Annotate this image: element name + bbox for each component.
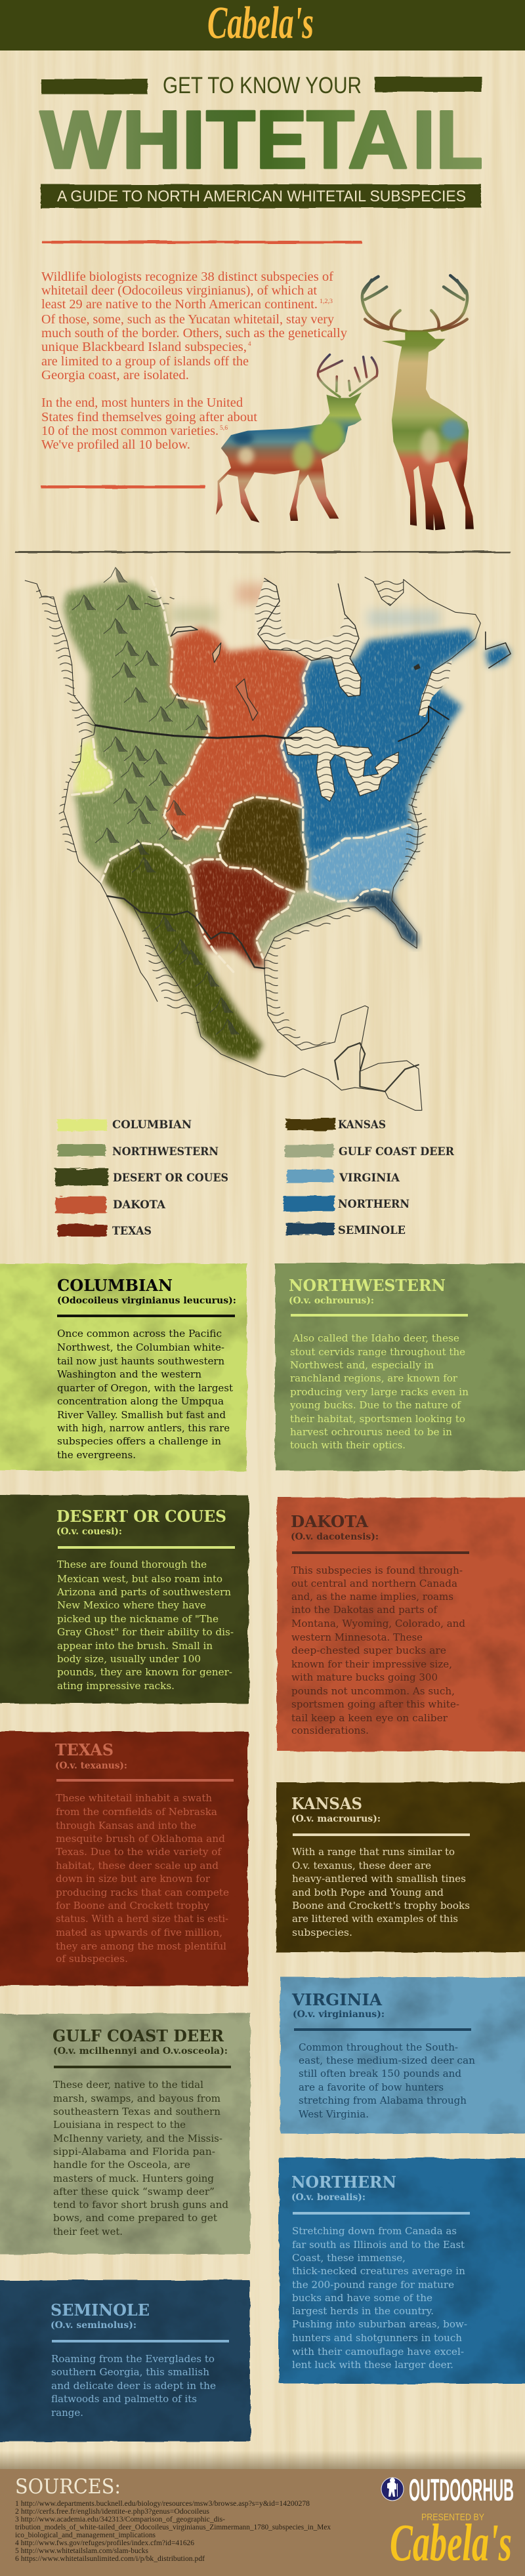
body text: for Boone and Crockett trophy bbox=[56, 1901, 210, 1912]
intro text: whitetail deer (Odocoileus virginianus), of which at bbox=[41, 284, 318, 298]
sources list: 3 http://www.academia.edu/342313/Comparison_of_geographic_dis- bbox=[15, 2514, 225, 2524]
body text: concentration along the Umpqua bbox=[57, 1397, 224, 1407]
heading: virginia: VIRGINIA bbox=[291, 1990, 383, 2009]
intro text: 1,2,3 bbox=[320, 298, 333, 304]
body text: sippi-Alabama and Florida pan- bbox=[53, 2147, 215, 2157]
intro rule bottom bbox=[41, 485, 205, 488]
body text: subspecies offers a challenge in bbox=[57, 1437, 221, 1447]
body text bbox=[56, 1793, 229, 1965]
body text: picked up the nickname of "The bbox=[57, 1614, 219, 1625]
panel: virginia bbox=[280, 1977, 525, 2133]
body text: the evergreens. bbox=[57, 1450, 136, 1461]
body text bbox=[289, 1334, 469, 1451]
body text bbox=[53, 2080, 228, 2238]
title bar right bbox=[375, 77, 482, 92]
body text: still often break 150 pounds and bbox=[299, 2069, 461, 2079]
body text: southern Georgia, this smallish bbox=[51, 2367, 209, 2378]
body text: they are among the most plentiful bbox=[56, 1942, 226, 1952]
body text: ranchland regions, are known for bbox=[290, 1374, 457, 1384]
legend item: dakota: DAKOTA bbox=[113, 1198, 166, 1212]
intro text: Of those, some, such as the Yucatan whitetail, stay very bbox=[41, 313, 334, 327]
body text: largest herds in the country. bbox=[292, 2306, 434, 2317]
heading: desert or coues: DESERT OR COUES bbox=[56, 1507, 226, 1526]
mountains bbox=[72, 567, 240, 1034]
body text: Stretching down from Canada as bbox=[292, 2226, 457, 2237]
subheading: (O.v. seminolus): bbox=[51, 2320, 136, 2331]
sources list bbox=[15, 2499, 331, 2563]
body text: Arizona and parts of southwestern bbox=[56, 1587, 231, 1598]
body text: touch with their optics. bbox=[290, 1441, 406, 1451]
body text: hunters and shotgunners in touch bbox=[292, 2333, 462, 2344]
body text: flatwoods and palmetto of its bbox=[51, 2394, 197, 2405]
range: northwestern bbox=[64, 582, 224, 870]
panel: northern bbox=[279, 2158, 525, 2384]
range boundaries: dashed bbox=[72, 577, 412, 973]
range: seminole bbox=[352, 892, 419, 949]
body text: Northwest and, especially in bbox=[290, 1360, 434, 1371]
body text: known for their impressive size, bbox=[291, 1660, 452, 1670]
body text: the 200-pound range for mature bbox=[292, 2280, 454, 2291]
body text: far south as Illinois and to the East bbox=[292, 2240, 465, 2251]
body text: and delicate deer is adept in the bbox=[51, 2381, 216, 2392]
body text: status. With a herd size that is esti- bbox=[56, 1914, 228, 1925]
legend item: northwestern bbox=[58, 1145, 219, 1158]
legend item: columbian: COLUMBIAN bbox=[112, 1118, 192, 1132]
body text: River Valley. Smallish but fast and bbox=[57, 1410, 226, 1421]
heading: kansas: KANSAS bbox=[291, 1794, 362, 1813]
body text: Once common across the Pacific bbox=[57, 1329, 222, 1339]
intro text: 10 of the most common varieties. bbox=[41, 424, 219, 438]
sources list: 5 http://www.whitetailslam.com/slam-bucks bbox=[15, 2546, 148, 2555]
legend item: kansas bbox=[286, 1118, 386, 1132]
subheading: (O.v. macrourus): bbox=[291, 1814, 381, 1824]
body text: handle for the Osceola, are bbox=[53, 2160, 190, 2171]
body text: quarter of Oregon, with the largest bbox=[57, 1383, 233, 1394]
body text: their habitat, sportsmen looking to bbox=[290, 1414, 465, 1425]
body text: stout cervids range throughout the bbox=[290, 1347, 465, 1358]
legend item: northern bbox=[284, 1196, 410, 1211]
body text: Roaming from the Everglades to bbox=[51, 2354, 215, 2365]
body text: thick-necked creatures average in bbox=[292, 2266, 465, 2277]
water: hudson bay and arctic hatching bbox=[33, 577, 452, 1050]
subtitle band: A GUIDE TO NORTH AMERICAN WHITETAIL SUBSPECIES bbox=[57, 188, 466, 205]
divider shadow line bbox=[14, 551, 511, 553]
body text: Common throughout the South- bbox=[299, 2043, 458, 2053]
body text: heavy-antlered with smallish tines bbox=[292, 1874, 466, 1885]
body text: ating impressive racks. bbox=[57, 1681, 175, 1692]
body text: producing racks that can compete bbox=[56, 1888, 229, 1898]
range: desert or coues bbox=[104, 843, 263, 1061]
intro text: 5,6 bbox=[220, 424, 228, 431]
body text: Montana, Wyoming, Colorado, and bbox=[291, 1619, 465, 1629]
body text: New Mexico where they have bbox=[57, 1601, 206, 1611]
range: columbian bbox=[75, 739, 112, 794]
legend item: seminole bbox=[286, 1223, 406, 1237]
body text: and both Pope and Young and bbox=[292, 1888, 444, 1898]
legend item: gulf coast deer bbox=[285, 1145, 455, 1158]
body text: are a favorite of bow hunters bbox=[299, 2083, 444, 2093]
sources list: 2 http://cerfs.free.fr/english/identite-e.php3?genus=Odocoileus bbox=[15, 2506, 209, 2516]
title: whitetail: A bbox=[348, 94, 408, 186]
body text: Pushing into suburban areas, bow- bbox=[292, 2320, 467, 2330]
intro rule top bbox=[42, 241, 362, 244]
body text: are littered with examples of this bbox=[292, 1914, 458, 1925]
heading: gulf coast deer: GULF COAST DEER bbox=[52, 2026, 224, 2045]
body text: Coast, these immense, bbox=[292, 2253, 406, 2264]
heading: dakota: DAKOTA bbox=[291, 1512, 369, 1531]
panel: kansas bbox=[276, 1782, 525, 1952]
title line: get to know your: GET TO KNOW YOUR bbox=[163, 73, 362, 98]
body text: harvest ochrourus need to be in bbox=[290, 1427, 452, 1438]
body text: Boone and Crockett's trophy books bbox=[292, 1901, 470, 1912]
body text: stretching from Alabama through bbox=[299, 2096, 467, 2106]
presented by: PRESENTED BY bbox=[421, 2512, 484, 2523]
legend bbox=[55, 1118, 455, 1238]
map: whitetail ranges of North America bbox=[25, 567, 511, 1111]
header band bbox=[0, 0, 525, 51]
title block bbox=[40, 73, 483, 208]
intro text: are limited to a group of islands off the bbox=[41, 355, 249, 369]
body text: sportsmen going after this white- bbox=[291, 1700, 459, 1710]
body text: east, these medium-sized deer can bbox=[299, 2056, 475, 2066]
body text: and, as the name implies, roams bbox=[291, 1592, 453, 1603]
intro text bbox=[41, 270, 347, 452]
body text: from the cornfields of Nebraska bbox=[56, 1807, 217, 1818]
legend item: gulf coast deer: GULF COAST DEER bbox=[339, 1145, 455, 1158]
body text: O.v. texanus, these deer are bbox=[292, 1861, 431, 1871]
subheading: (O.v. mcilhennyi and O.v.osceola): bbox=[53, 2046, 228, 2056]
body text: tend to favor short brush guns and bbox=[53, 2200, 228, 2211]
title: whitetail bbox=[40, 94, 483, 186]
body text: into the Dakotas and parts of bbox=[291, 1605, 438, 1616]
heading: texas: TEXAS bbox=[55, 1740, 114, 1759]
body text: after these quick “swamp deer” bbox=[53, 2187, 215, 2198]
legend item: columbian bbox=[58, 1118, 192, 1132]
body text: Gray Ghost" for their ability to dis- bbox=[57, 1627, 234, 1638]
intro text: States find themselves going after about bbox=[41, 411, 258, 424]
legend item: texas: TEXAS bbox=[112, 1225, 152, 1238]
body text: These whitetail inhabit a swath bbox=[56, 1793, 212, 1804]
range: virginia bbox=[310, 825, 419, 901]
body text: These deer, native to the tidal bbox=[53, 2080, 203, 2091]
body text: with their camouflage have excel- bbox=[292, 2347, 464, 2358]
legend item: seminole: SEMINOLE bbox=[338, 1224, 406, 1237]
title: whitetail: I bbox=[182, 94, 205, 186]
panel: columbian bbox=[0, 1263, 247, 1471]
range: kansas bbox=[218, 797, 308, 891]
body text: Mexican west, but also roam into bbox=[57, 1574, 222, 1585]
subheading: (Odocoileus virginianus leucurus): bbox=[57, 1296, 236, 1306]
range: dakota bbox=[164, 628, 310, 840]
legend item: desert or coues bbox=[55, 1169, 228, 1185]
body text: pounds not uncommon. As such, bbox=[291, 1687, 455, 1697]
panel: texas bbox=[0, 1732, 248, 1986]
body text bbox=[51, 2354, 216, 2419]
intro text: unique Blackbeard Island subspecies, bbox=[41, 340, 247, 354]
subheading: (O.v. borealis): bbox=[291, 2192, 366, 2203]
body text: out central and northern Canada bbox=[291, 1579, 457, 1589]
body text: pounds, they are known for gener- bbox=[57, 1667, 232, 1678]
sources list: 4 http://www.fws.gov/refuges/profiles/index.cfm?id=41626 bbox=[15, 2538, 194, 2547]
legend item: virginia bbox=[287, 1170, 400, 1185]
subheading: (O.v. ochrourus): bbox=[289, 1296, 374, 1306]
panel: gulf coast deer bbox=[0, 2014, 250, 2254]
faint color washes bbox=[171, 584, 440, 626]
body text: mated as upwards of five million, bbox=[56, 1928, 222, 1938]
body text: producing very large racks even in bbox=[290, 1387, 469, 1398]
body text: considerations. bbox=[291, 1726, 369, 1736]
body text: down in size but are known for bbox=[56, 1874, 210, 1885]
body text: Northwest, the Columbian white- bbox=[57, 1343, 224, 1353]
body text bbox=[291, 1566, 465, 1736]
heading: northwestern: NORTHWESTERN bbox=[289, 1276, 446, 1295]
body text: range. bbox=[51, 2408, 83, 2419]
heading: northern: NORTHERN bbox=[291, 2173, 396, 2192]
title: whitetail: I bbox=[412, 94, 436, 186]
range: gulf coast bbox=[256, 892, 352, 956]
intro text: much south of the border. Others, such as the genetically bbox=[41, 327, 347, 340]
intro text: Georgia coast, are isolated. bbox=[41, 369, 189, 382]
body text: bucks and have some of the bbox=[292, 2293, 432, 2304]
body text: western Minnesota. These bbox=[291, 1633, 423, 1643]
body text: of subspecies. bbox=[56, 1954, 128, 1965]
subheading: (O.v. virginianus): bbox=[293, 2009, 385, 2020]
range: northern bbox=[282, 630, 511, 859]
body text: Texas. Due to the wide variety of bbox=[56, 1847, 222, 1858]
legend item: dakota bbox=[56, 1196, 166, 1214]
panel: northwestern bbox=[275, 1263, 525, 1471]
body text: Louisiana in respect to the bbox=[53, 2120, 186, 2131]
body text: deep-chested super bucks are bbox=[291, 1646, 446, 1656]
body text: masters of muck. Hunters going bbox=[53, 2174, 214, 2184]
title: whitetail: L bbox=[436, 94, 483, 186]
heading: seminole: SEMINOLE bbox=[51, 2300, 150, 2320]
sources list: tribution_models_of_white-tailed_deer_Odocoileus_virginianus_Zimmermann_1780_subspecies_in_Mex bbox=[15, 2522, 331, 2531]
body text bbox=[299, 2043, 475, 2120]
legend item: northwestern: NORTHWESTERN bbox=[112, 1145, 219, 1158]
legend item: kansas: KANSAS bbox=[338, 1118, 386, 1132]
body text: These are found thorough the bbox=[57, 1560, 207, 1570]
heading: sources: SOURCES: bbox=[15, 2475, 121, 2499]
icon: large deer silhouette bbox=[362, 276, 476, 530]
body text: marsh, swamps, and bayous from bbox=[53, 2094, 220, 2104]
body text: their feet wet. bbox=[53, 2227, 123, 2238]
body text: tail keep a keen eye on caliber bbox=[291, 1713, 448, 1724]
body text: habitat, these deer scale up and bbox=[56, 1861, 219, 1871]
body text: mesquite brush of Oklahoma and bbox=[56, 1834, 225, 1845]
sources list: 6 https://www.whitetailsunlimited.com/i/p/bk_distribution.pdf bbox=[15, 2554, 205, 2563]
body text bbox=[292, 2226, 467, 2371]
panel: dakota bbox=[277, 1498, 525, 1751]
panel: seminole bbox=[0, 2280, 250, 2442]
body text: This subspecies is found through- bbox=[291, 1566, 463, 1576]
panel: desert or coues bbox=[0, 1495, 249, 1704]
body text: bows, and come prepared to get bbox=[53, 2213, 217, 2224]
legend item: northern: NORTHERN bbox=[338, 1198, 410, 1211]
coastlines and borders bbox=[25, 577, 511, 1111]
range: texas bbox=[191, 859, 295, 967]
title: whitetail: W bbox=[40, 94, 121, 186]
footer bbox=[0, 2469, 525, 2576]
legend item: texas bbox=[58, 1225, 152, 1238]
body text bbox=[56, 1560, 234, 1692]
body text: Also called the Idaho deer, these bbox=[292, 1334, 459, 1344]
body text: young bucks. Due to the nature of bbox=[289, 1400, 462, 1411]
sources list: ico_biological_and_management_implications bbox=[15, 2530, 156, 2539]
body text: subspecies. bbox=[292, 1928, 352, 1938]
title: whitetail: E bbox=[256, 94, 307, 186]
body text: McIhenny variety, and the Missis- bbox=[53, 2134, 222, 2144]
intro text: In the end, most hunters in the United bbox=[41, 396, 243, 410]
intro text: 4 bbox=[248, 340, 251, 347]
body text: southeastern Texas and southern bbox=[53, 2107, 220, 2117]
body text: Washington and the western bbox=[57, 1370, 201, 1380]
body text: appear into the brush. Small in bbox=[57, 1641, 213, 1652]
body text: with high, narrow antlers, this rare bbox=[57, 1423, 230, 1434]
body text: West Virginia. bbox=[299, 2110, 369, 2120]
body text bbox=[57, 1329, 233, 1461]
legend item: virginia: VIRGINIA bbox=[339, 1172, 400, 1185]
title: whitetail: T bbox=[306, 94, 354, 186]
title: whitetail: H bbox=[122, 94, 181, 186]
subheading: (O.v. dacotensis): bbox=[291, 1532, 379, 1542]
intro text: least 29 are native to the North American continent. bbox=[41, 298, 318, 312]
intro text: Wildlife biologists recognize 38 distinct subspecies of bbox=[41, 270, 334, 284]
heading: columbian: COLUMBIAN bbox=[57, 1276, 173, 1295]
sources list: 1 http://www.departments.bucknell.edu/biology/resources/msw3/browse.asp?s=y&id=14200278 bbox=[15, 2499, 310, 2508]
body text: With a range that runs similar to bbox=[292, 1847, 455, 1858]
title: whitetail: T bbox=[206, 94, 255, 186]
icon: small deer silhouette bbox=[216, 355, 377, 523]
body text: through Kansas and into the bbox=[56, 1821, 196, 1831]
title bar left bbox=[41, 79, 148, 94]
legend item: desert or coues: DESERT OR COUES bbox=[113, 1172, 228, 1185]
subheading: (O.v. texanus): bbox=[55, 1761, 127, 1771]
subheading: (O.v. couesi): bbox=[56, 1526, 122, 1537]
body text: lent luck with these larger deer. bbox=[292, 2360, 453, 2371]
intro text: We've profiled all 10 below. bbox=[41, 438, 190, 452]
body text: with mature bucks going 300 bbox=[291, 1673, 438, 1683]
icon: hiker badge bbox=[381, 2478, 404, 2501]
body text bbox=[292, 1847, 470, 1938]
body text: body size, usually under 100 bbox=[57, 1654, 201, 1665]
body text: tail now just haunts southwestern bbox=[57, 1357, 224, 1367]
